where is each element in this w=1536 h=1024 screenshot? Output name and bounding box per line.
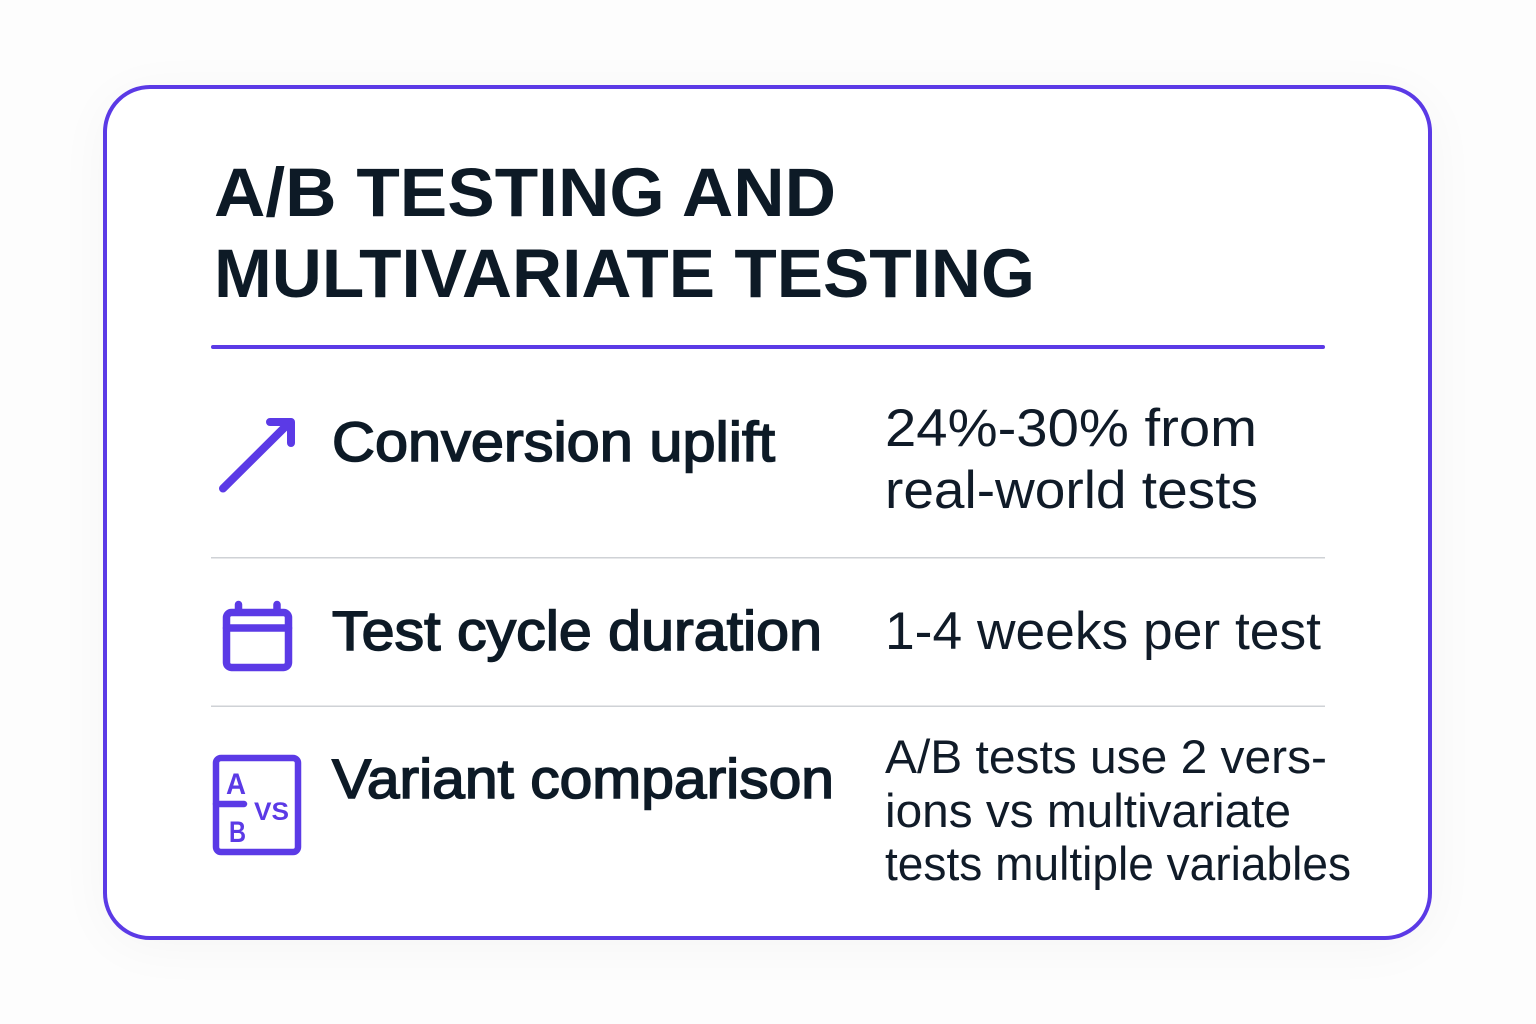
label: conversion uplift: Conversion uplift: [332, 410, 775, 473]
label: test cycle duration: Test cycle duration: [332, 599, 822, 662]
title: A/B TESTING AND: [214, 154, 836, 231]
icon: A/B vs: B: [229, 816, 246, 849]
label: variant comparison: Variant comparison: [332, 747, 834, 810]
icon: A/B vs: [216, 758, 298, 852]
icon: up arrow: [223, 422, 291, 488]
icon: A/B vs: A: [226, 768, 246, 801]
title: MULTIVARIATE TESTING: [214, 235, 1035, 312]
value: variant comparison: tests multiple variables: [885, 837, 1351, 890]
value: variant comparison: ions vs multivariate: [885, 784, 1291, 837]
panel: card: [105, 87, 1430, 938]
title: [214, 154, 1035, 312]
value: conversion uplift: 24%-30% from: [885, 399, 1257, 458]
title divider: [211, 345, 1325, 349]
value: conversion uplift: [885, 399, 1258, 520]
row: conversion uplift: [223, 399, 1258, 520]
card shadow: [105, 95, 1430, 945]
icon: calendar: [226, 604, 288, 668]
value: test cycle duration: 1-4 weeks per test: [885, 602, 1321, 661]
row: test cycle duration: [226, 599, 1321, 668]
row: variant comparison: [216, 730, 1351, 890]
value: variant comparison: [885, 730, 1351, 890]
icon: A/B vs: VS: [254, 798, 289, 826]
value: variant comparison: A/B tests use 2 vers-: [885, 730, 1327, 783]
value: conversion uplift: real-world tests: [885, 461, 1258, 520]
